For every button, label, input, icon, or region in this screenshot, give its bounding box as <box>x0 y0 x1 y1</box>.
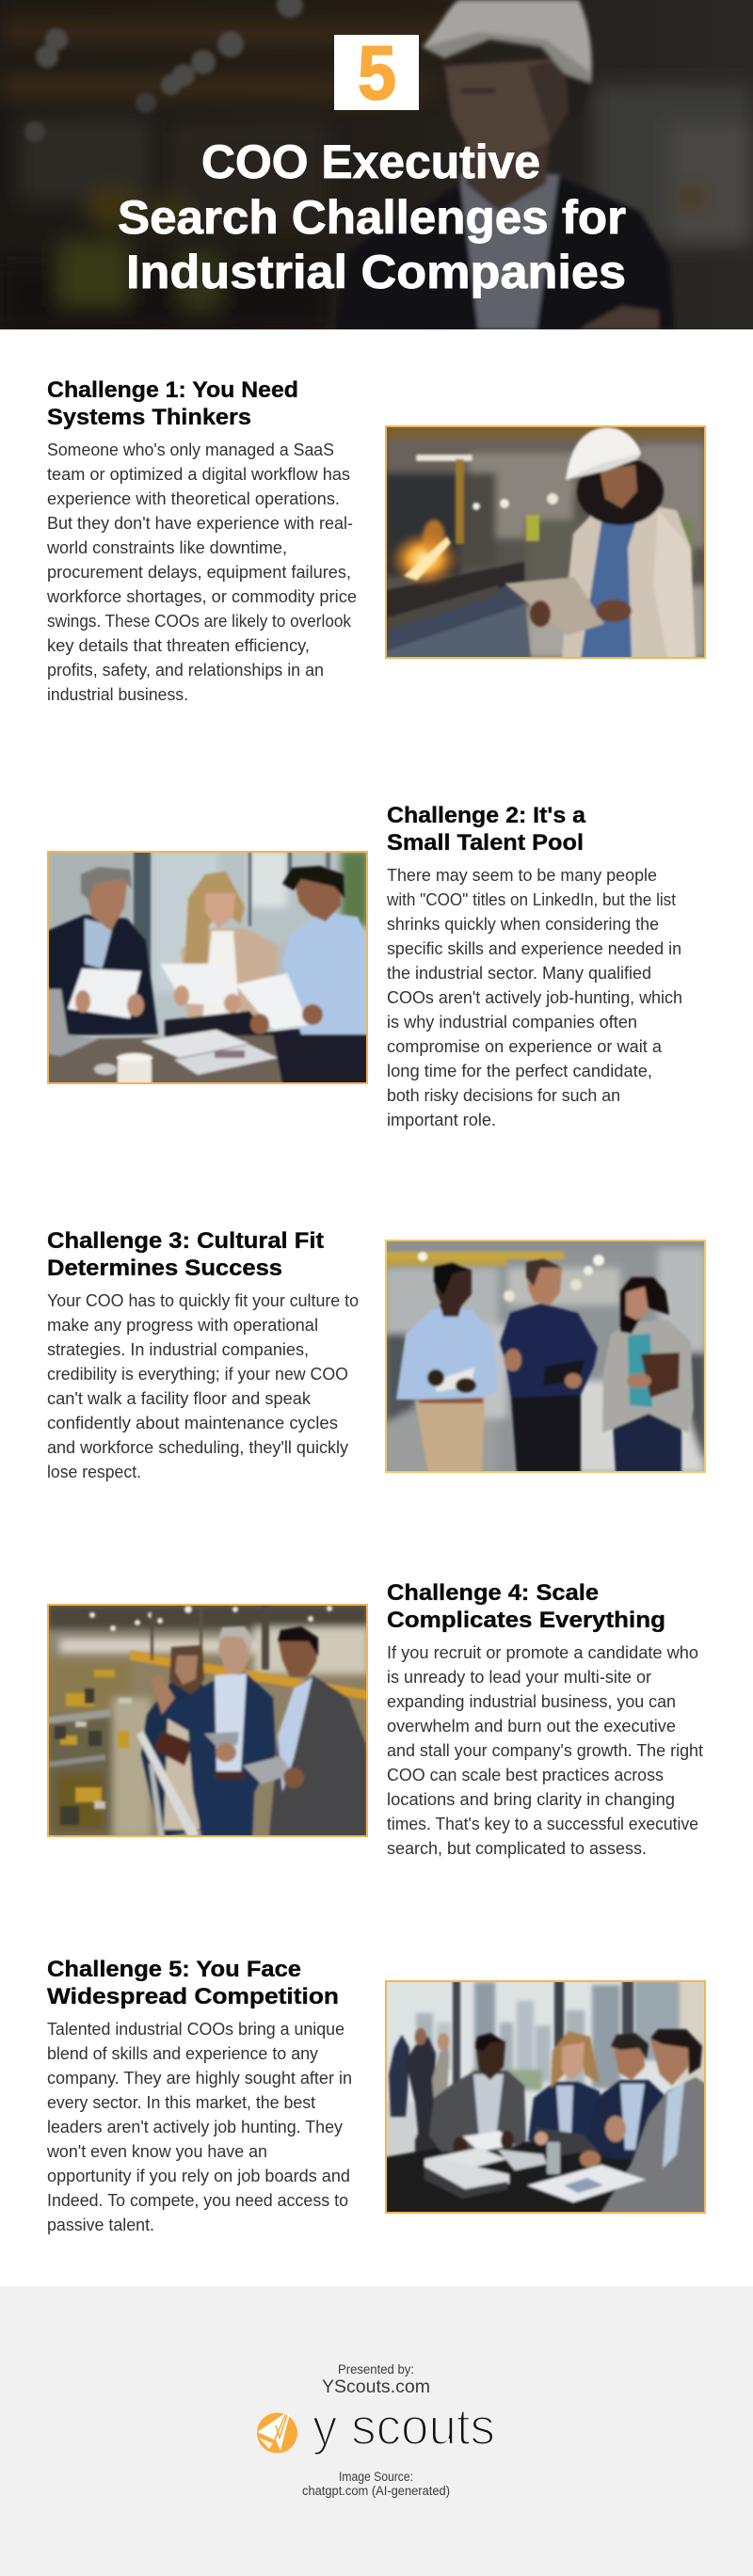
body text: challenge 5: every sector. In this market, the best <box>47 2093 315 2112</box>
image source text <box>302 2470 450 2498</box>
panel: challenge 2 <box>47 803 682 1129</box>
table <box>47 1035 282 1084</box>
heading: challenge 5: Widespread Competition <box>47 1984 339 2009</box>
title: COO Executive <box>201 136 540 188</box>
body text: challenge 1: Someone who's only managed a SaaS <box>47 440 334 459</box>
crossed arm <box>579 306 659 329</box>
body text: challenge 1: procurement delays, equipment failures, <box>47 563 351 582</box>
heading: challenge 1: Systems Thinkers <box>47 405 251 430</box>
blazer <box>562 505 696 659</box>
body text: challenge 4: and stall your company's growth. The right <box>387 1741 703 1760</box>
woman: blazer <box>602 1320 694 1432</box>
heading: challenge 5 <box>47 1957 339 2009</box>
image source text: Image Source: <box>339 2470 413 2484</box>
photo: three colleagues walking in a plant <box>385 1240 706 1473</box>
left man <box>47 915 158 1035</box>
body text: challenge 5: blend of skills and experience to any <box>47 2044 318 2063</box>
presented by text <box>322 2361 430 2397</box>
body text: challenge 3: credibility is everything; if your new COO <box>47 1365 348 1384</box>
clipboard <box>505 577 604 635</box>
background people <box>389 2035 409 2117</box>
heading: challenge 4: Complicates Everything <box>387 1608 665 1633</box>
body text: challenge 4: is unready to lead your multi-site or <box>387 1668 651 1687</box>
body text: challenge 2: COOs aren't actively job-hunting, which <box>387 988 682 1007</box>
badge: number 5 <box>334 31 419 116</box>
heading: challenge 1: Challenge 1: You Need <box>47 377 298 403</box>
right man pants <box>249 1025 368 1084</box>
helmet <box>423 0 592 83</box>
body text: challenge 4: times. That's key to a successful executive <box>387 1815 698 1833</box>
heading: challenge 2 <box>387 803 585 856</box>
hands and papers <box>462 2131 515 2152</box>
sparks <box>389 520 460 587</box>
woman <box>181 928 277 1025</box>
body text: challenge 2: long time for the perfect candidate, <box>387 1062 652 1080</box>
body text: challenge 1: profits, safety, and relationships in an <box>47 661 324 680</box>
body text: challenge 5: company. They are highly sought after in <box>47 2069 352 2088</box>
papers <box>68 968 141 1018</box>
table <box>385 2140 706 2214</box>
body text: challenge 2: specific skills and experience needed in <box>387 939 681 958</box>
title <box>118 136 626 298</box>
body text: challenge 3: confidently about maintenance cycles <box>47 1414 338 1432</box>
body text: challenge 4: overwhelm and burn out the executive <box>387 1717 676 1736</box>
body text: challenge 2: compromise on experience or wait a <box>387 1037 663 1056</box>
header photo: engineer in hard hat <box>0 0 753 329</box>
face <box>600 465 637 508</box>
body text: challenge 2: shrinks quickly when considering the <box>387 915 659 934</box>
chair <box>415 2098 441 2159</box>
presented by text: YScouts.com <box>322 2377 430 2397</box>
body text: challenge 4: locations and bring clarity in changing <box>387 1790 675 1809</box>
body text: challenge 3: can't walk a facility floor and speak <box>47 1389 312 1408</box>
body text: challenge 1 <box>46 440 357 704</box>
image source text: chatgpt.com (AI-generated) <box>302 2484 450 2498</box>
body text: challenge 1: workforce shortages, or commodity price <box>46 587 357 606</box>
heading: challenge 1 <box>47 377 298 430</box>
wordmark: y scouts <box>312 2397 495 2456</box>
middle man: pants <box>511 1394 581 1473</box>
body text: challenge 3: strategies. In industrial companies, <box>47 1340 309 1359</box>
documents on table <box>141 1030 249 1058</box>
body text: challenge 5: opportunity if you rely on job boards and <box>47 2167 350 2185</box>
left man: pants <box>415 1398 485 1473</box>
panel: challenge 3 <box>47 1228 706 1481</box>
badge: number 5: 5 <box>358 31 396 116</box>
neck <box>463 122 551 212</box>
footer panel <box>0 2286 753 2576</box>
body text: challenge 1: industrial business. <box>47 685 188 704</box>
photo: executive team at a boardroom table <box>385 1980 706 2214</box>
documents <box>425 2148 507 2173</box>
body text: challenge 2: with "COO" titles on LinkedIn, but the list <box>386 890 676 909</box>
body text: challenge 5: leaders aren't actively job hunting. They <box>47 2118 343 2136</box>
body text: challenge 1: swings. These COOs are likely to overlook <box>47 612 352 631</box>
body text: challenge 2 <box>386 866 682 1129</box>
hands <box>530 600 551 627</box>
heading: challenge 2: Challenge 2: It's a <box>387 803 585 828</box>
body text: challenge 4: If you recruit or promote a candidate who <box>387 1643 698 1662</box>
photo: executives on a factory mezzanine <box>47 1604 368 1837</box>
body text: challenge 2: is why industrial companies often <box>387 1013 637 1032</box>
heading: challenge 3: Challenge 3: Cultural Fit <box>47 1228 324 1254</box>
woman: pants <box>612 1405 681 1473</box>
middle man: polo <box>500 1304 598 1398</box>
heading: challenge 4: Challenge 4: Scale <box>387 1580 599 1606</box>
cup <box>118 1058 152 1086</box>
woman <box>141 1682 205 1837</box>
railing <box>136 1731 200 1837</box>
side hair <box>541 56 591 122</box>
man 1 <box>429 2071 526 2152</box>
body text: challenge 3: lose respect. <box>47 1463 141 1481</box>
face <box>444 58 567 162</box>
heading: challenge 3: Determines Success <box>47 1256 282 1281</box>
panel: challenge 5 <box>46 1957 706 2234</box>
helmet <box>566 427 641 480</box>
glass <box>547 2142 560 2174</box>
body text: challenge 4: COO can scale best practices across <box>387 1766 664 1784</box>
body text: challenge 4: search, but complicated to assess. <box>387 1839 647 1858</box>
photo: three executives reading documents <box>47 851 368 1086</box>
icon: paper plane in orange circle <box>257 2413 297 2453</box>
heading: challenge 3 <box>47 1228 324 1281</box>
shirt <box>459 174 559 329</box>
body text: challenge 3: make any progress with operational <box>47 1316 318 1335</box>
suit <box>336 179 674 329</box>
right man: suit <box>269 1675 366 1837</box>
body text: challenge 2: the industrial sector. Many qualified <box>387 964 651 983</box>
panel: challenge 1 <box>46 377 706 704</box>
heading: challenge 4 <box>387 1580 665 1633</box>
body text: challenge 2: important role. <box>387 1111 496 1129</box>
heading: challenge 5: Challenge 5: You Face <box>47 1957 301 1982</box>
man 3 <box>585 2080 667 2159</box>
body text: challenge 5: passive talent. <box>47 2216 154 2234</box>
body text: challenge 1: But they don't have experience with real- <box>47 514 353 533</box>
hair <box>577 457 664 525</box>
woman <box>528 2082 603 2148</box>
right man shirt <box>282 912 368 1034</box>
body text: challenge 3: Your COO has to quickly fit your culture to <box>47 1291 359 1310</box>
panel: challenge 4 <box>47 1580 703 1858</box>
shirt <box>581 505 641 659</box>
man 4 <box>601 2077 706 2214</box>
header banner <box>0 0 753 329</box>
body text: challenge 3: and workforce scheduling, they'll quickly <box>47 1438 348 1457</box>
body text: challenge 2: There may seem to be many people <box>387 866 657 885</box>
laptop <box>47 989 99 1056</box>
old man: suit <box>164 1672 276 1837</box>
hands <box>75 990 90 1013</box>
title: Search Challenges for <box>118 191 626 244</box>
machine <box>385 562 524 623</box>
body text: challenge 1: key details that threaten efficiency, <box>47 636 310 655</box>
body text: challenge 4: expanding industrial business, you can <box>387 1692 676 1711</box>
body text: challenge 1: team or optimized a digital workflow has <box>47 465 350 484</box>
heading: challenge 2: Small Talent Pool <box>387 830 584 856</box>
body text: challenge 5: Indeed. To compete, you need access to <box>47 2191 348 2210</box>
body text: challenge 2: both risky decisions for such an <box>387 1086 620 1105</box>
left man: shirt <box>396 1309 498 1400</box>
photo: woman in hard hat with clipboard <box>385 425 706 659</box>
title: Industrial Companies <box>126 246 626 298</box>
body text: challenge 5: Talented industrial COOs bring a unique <box>47 2020 344 2039</box>
logo: Y Scouts <box>257 2397 495 2456</box>
presented by text: Presented by: <box>338 2361 414 2376</box>
body text: challenge 1: world constraints like downtime, <box>46 538 287 557</box>
body text: challenge 5: won't even know you have an <box>46 2142 267 2161</box>
body text: challenge 1: experience with theoretical operations. <box>47 489 340 508</box>
body text: challenge 4 <box>387 1643 703 1858</box>
body text: challenge 3 <box>47 1291 359 1481</box>
body text: challenge 5 <box>46 2020 352 2234</box>
